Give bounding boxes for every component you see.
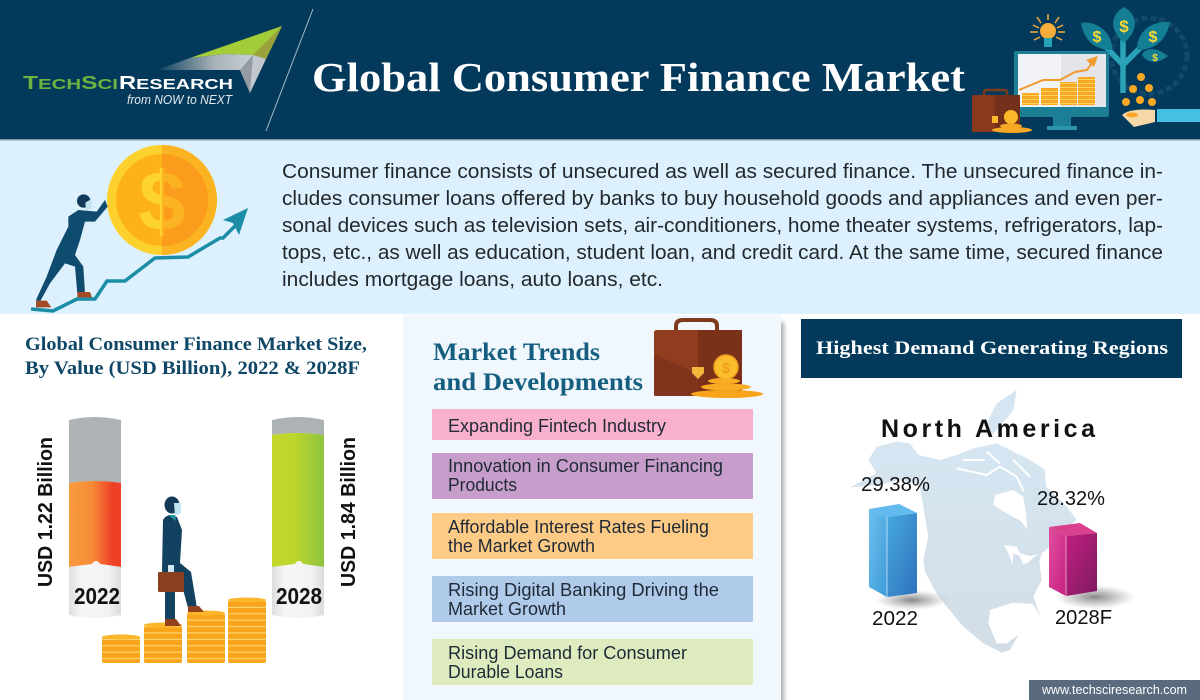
- trend: Rising Demand for Consumer Durable Loans: [432, 639, 753, 685]
- intro paragraph: sonal devices such as television sets, air-conditioners, home theater systems, refrigerators, lap-: [282, 215, 1163, 237]
- icon: light bulb: [1030, 14, 1065, 47]
- heading: regions: [801, 319, 1182, 378]
- map: North America: [850, 390, 1077, 653]
- trend: Affordable Interest Rates: the Market Growth: [448, 536, 595, 556]
- cylinder: 2022: [69, 417, 121, 618]
- panel: market size: [25, 334, 367, 663]
- icon: rising arrow: [31, 208, 248, 311]
- icon: briefcase with coins: [972, 90, 1032, 133]
- trend: Rising Demand for Consumer Durable Loans: Rising Demand for Consumer: [448, 643, 687, 663]
- trend: Rising Digital Banking: Market Growth: [448, 599, 566, 619]
- icon: hand: [1122, 109, 1200, 127]
- bar: 2022: [869, 504, 948, 610]
- trend: Affordable Interest Rates: Affordable Interest Rates Fueling: [448, 517, 709, 537]
- value: 28.32%: 28.32%: [1037, 488, 1105, 510]
- icon: briefcase with coins: $: [722, 360, 731, 377]
- cylinder: 2028: [272, 417, 324, 618]
- icon: monitor with chart: [1014, 51, 1109, 130]
- footer: website: [1029, 680, 1200, 700]
- logo: TechSci Research: T ECH S CI: [23, 73, 118, 93]
- panel: market trends: [403, 315, 784, 700]
- icon: dollar coin: [107, 145, 217, 255]
- heading: market size: By Value (USD Billion), 2022 & 2028F: [25, 358, 360, 379]
- heading: market trends: Market Trends: [433, 339, 600, 366]
- logo: TechSci Research: from NOW to NEXT: [127, 93, 233, 107]
- header band: [0, 0, 1200, 140]
- bar: 2028F: [1049, 523, 1135, 609]
- trend: Rising Digital Banking: [432, 576, 753, 622]
- trend: Expanding Fintech Industry: Expanding Fintech Industry: [448, 416, 666, 436]
- intro paragraph: tops, etc., as well as education, student loan, and credit card. At the same time, secured finance: [282, 242, 1163, 264]
- icon: dollar coin: $: [139, 154, 185, 248]
- label: USD 1.22 Billion: USD 1.22 Billion: [35, 437, 57, 587]
- icon: coin stacks: [102, 598, 266, 663]
- icon: briefcase with coins: [654, 320, 763, 398]
- icon: finance illustration: [972, 7, 1200, 133]
- title: Global Consumer Finance Market: [312, 54, 965, 100]
- icon: money plant: $: [1093, 29, 1102, 46]
- icon: dashed ring: [1111, 18, 1187, 94]
- title: North America: North America: [881, 415, 1096, 443]
- divider line: [266, 9, 313, 131]
- trend: Rising Digital Banking: Rising Digital Banking Driving the: [448, 580, 719, 600]
- heading: market size: Global Consumer Finance Market Size,: [25, 334, 367, 355]
- icon: money plant: $: [1119, 17, 1129, 36]
- trend: Expanding Fintech Industry: [432, 409, 753, 440]
- intro paragraph: Consumer finance consists of unsecured as well as secured finance. The unsecured finance in-: [282, 161, 1163, 183]
- logo: TechSci Research: [23, 26, 282, 107]
- cylinder: 2028: 2028: [276, 583, 322, 609]
- heading: regions: Highest Demand Generating Regions: [816, 338, 1168, 359]
- label: USD 1.84 Billion: USD 1.84 Billion: [338, 437, 360, 587]
- icon: money plant: $: [1149, 29, 1158, 46]
- label: 2028F: 2028F: [1055, 607, 1112, 629]
- icon: businessman climbing coins: [158, 496, 204, 626]
- intro paragraph: [282, 161, 1163, 291]
- intro paragraph: cludes consumer loans offered by banks to buy household goods and appliances and even per-: [282, 188, 1163, 210]
- value: 29.38%: 29.38%: [861, 474, 930, 496]
- intro paragraph: includes mortgage loans, auto loans, etc.: [282, 269, 663, 291]
- intro band: [0, 140, 1200, 314]
- footer: website: www.techsciresearch.com: [1041, 683, 1187, 697]
- trend: Innovation in Consumer Financing Products: Products: [448, 475, 517, 495]
- heading: market trends: and Developments: [433, 369, 643, 396]
- cylinder: 2022: 2022: [74, 583, 120, 609]
- trend: Affordable Interest Rates: [432, 513, 753, 559]
- panel: regions: [801, 319, 1182, 653]
- trend: Innovation in Consumer Financing Products: [432, 453, 753, 499]
- icon: money plant: $: [1152, 53, 1158, 64]
- label: 2022: 2022: [872, 608, 918, 630]
- trend: Innovation in Consumer Financing Products: Innovation in Consumer Financing: [448, 456, 723, 476]
- logo: TechSci Research: R ESEARCH: [119, 73, 233, 93]
- icon: money plant: [1081, 7, 1170, 106]
- heading: market size: [25, 334, 367, 379]
- icon: man pushing dollar coin up a rising arrow: [31, 145, 248, 311]
- heading: market trends: [433, 339, 643, 396]
- icon: businessman: [36, 194, 108, 307]
- trend: Rising Demand for Consumer Durable Loans: Durable Loans: [448, 662, 563, 682]
